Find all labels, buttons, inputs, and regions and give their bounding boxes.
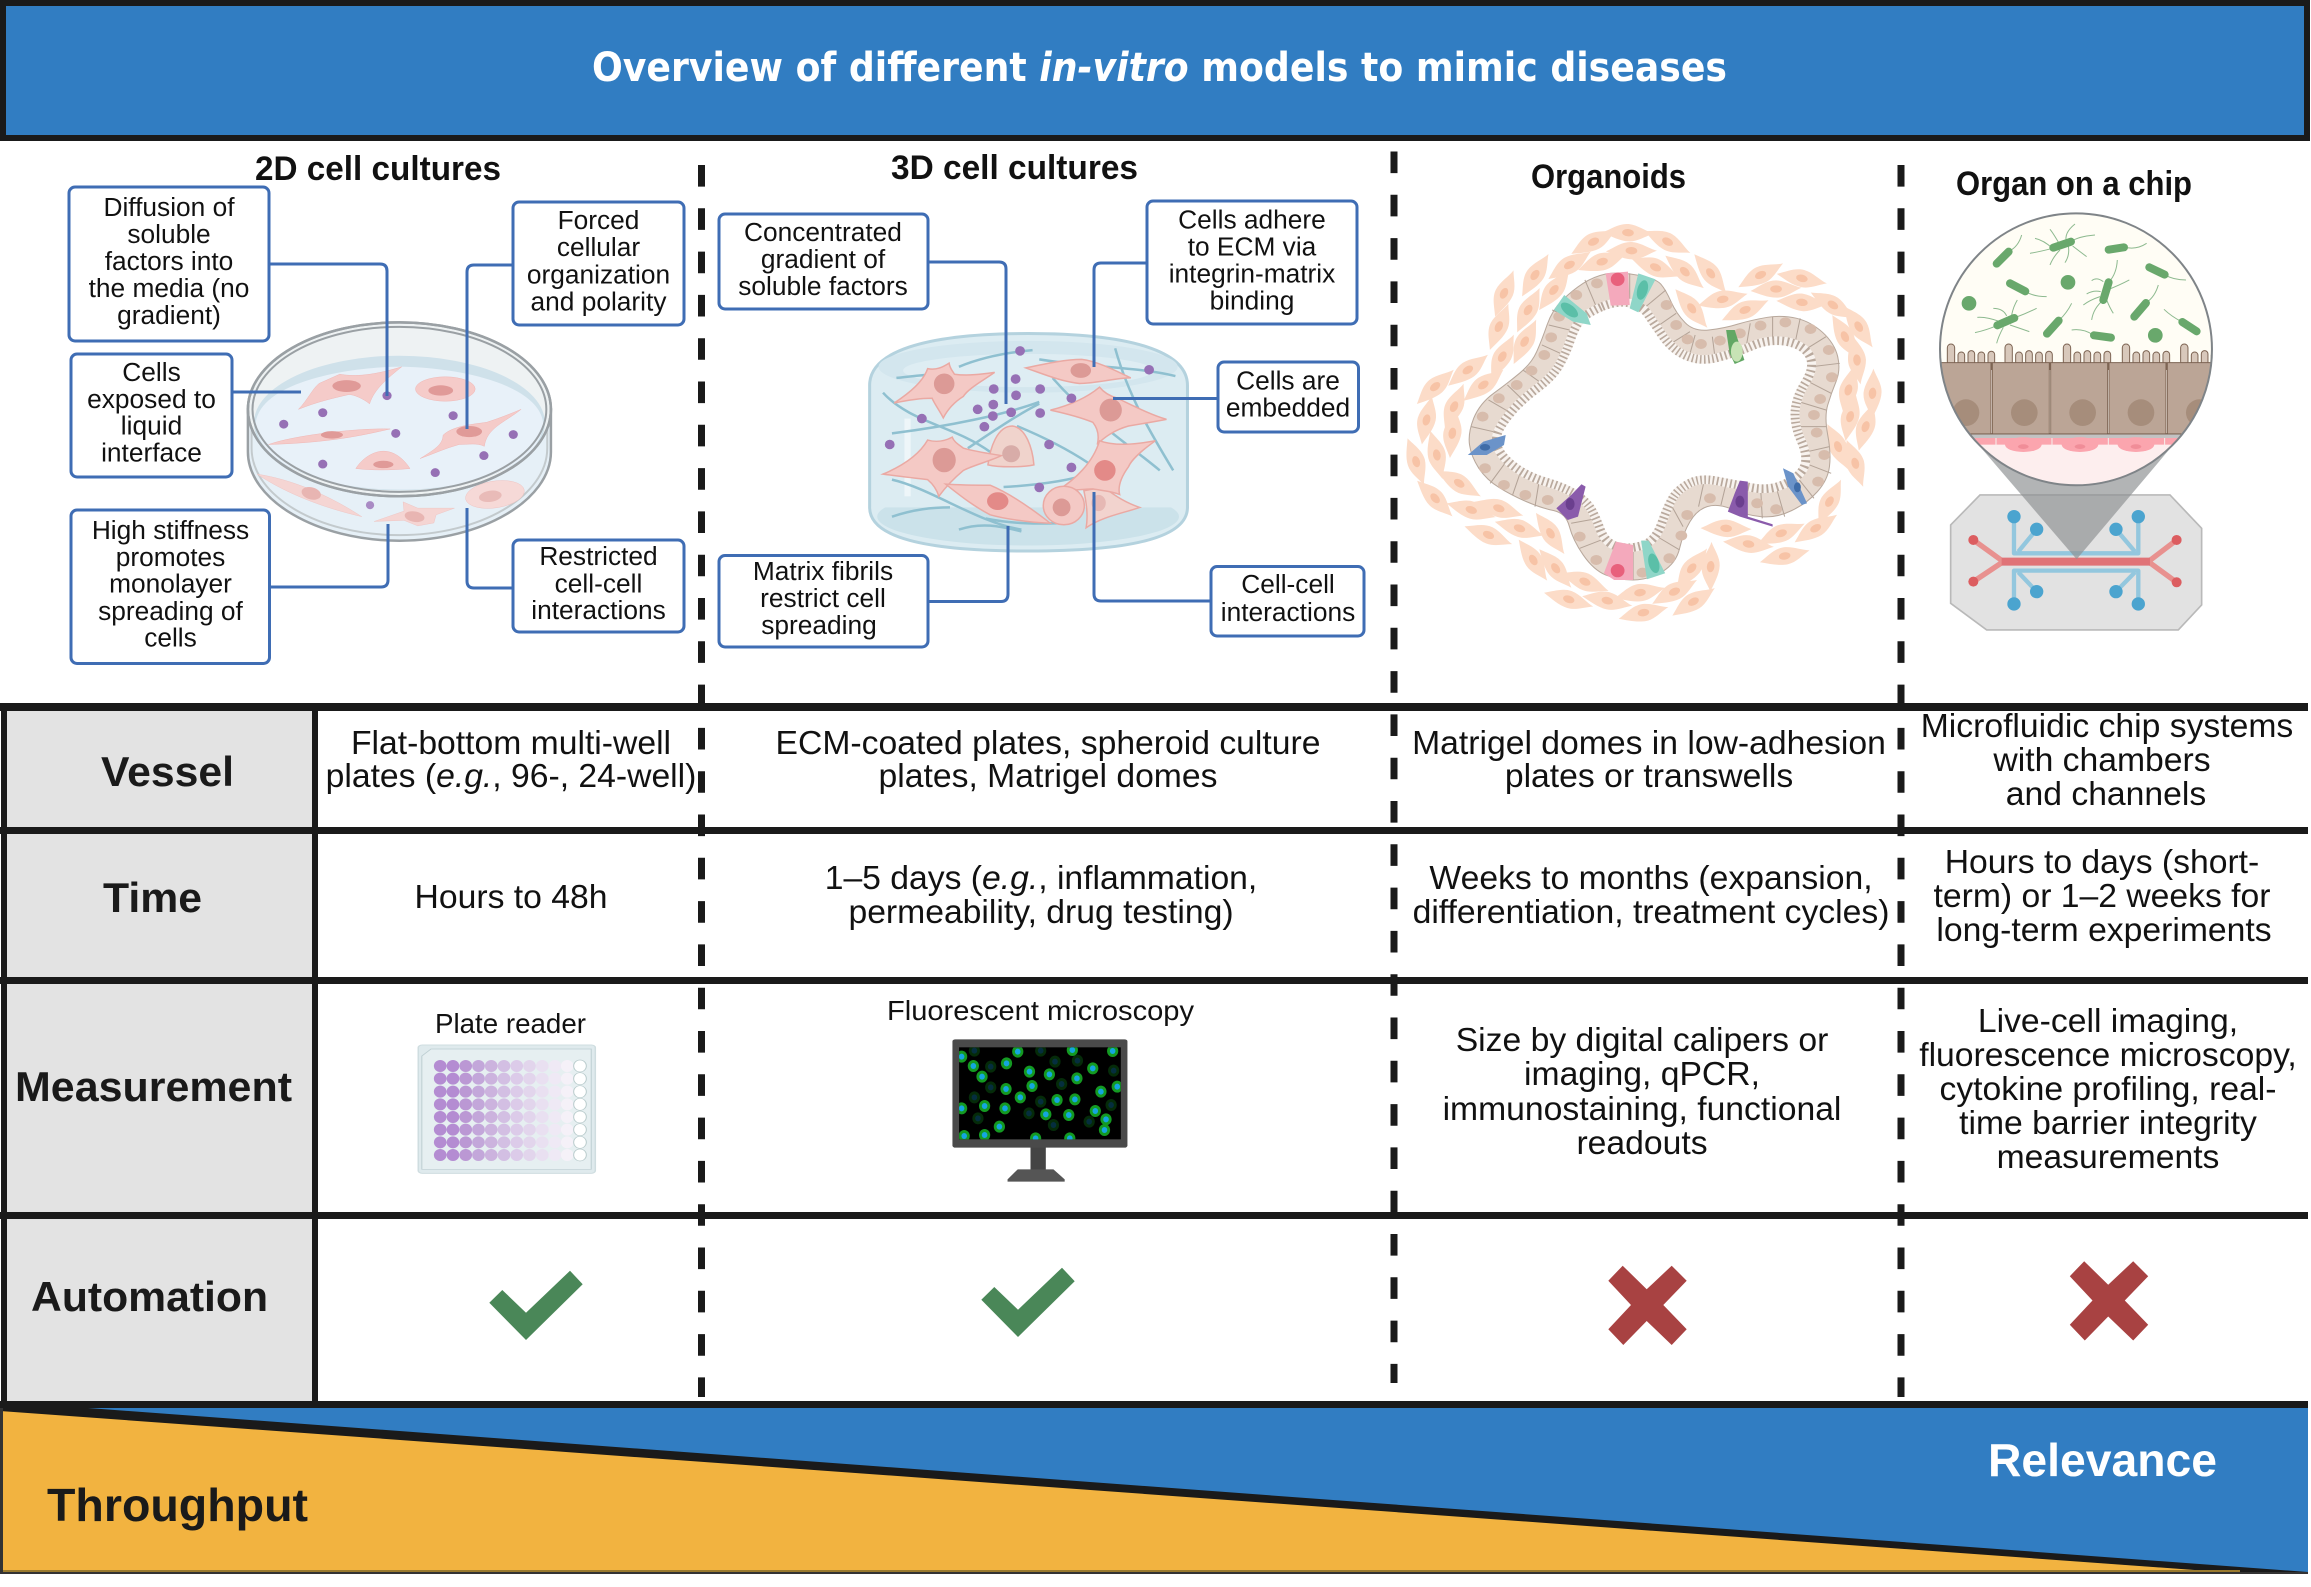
callout: concentrated gradient: [719, 214, 928, 309]
callout: high stiffness: [71, 510, 270, 664]
illustration: organ on a chip: [1939, 212, 2213, 631]
callout: high stiffness: promotes: [116, 542, 225, 572]
callout: high stiffness: cells: [144, 622, 197, 652]
text: measurement chip: [1919, 1002, 2297, 1176]
callout: concentrated gradient: Concentrated: [744, 217, 902, 247]
magnified tissue lens: [1939, 212, 2213, 486]
callout: matrix fibrils: [719, 556, 928, 647]
callout: diffusion: [69, 187, 269, 341]
callout: liquid interface: interface: [101, 438, 202, 468]
illustration: 3D hydrogel with embedded cells: [870, 334, 1187, 551]
table grid: [0, 703, 2308, 1409]
row label: Measurement: Measurement: [15, 1063, 292, 1110]
text: time chip: Hours to days (short-: [1945, 843, 2259, 881]
connector lines: [928, 262, 1218, 602]
callout: forced organization: organization: [527, 260, 670, 290]
callout: forced organization: and polarity: [531, 286, 667, 316]
measurement: plate reader: Plate reader: [435, 1008, 586, 1039]
title banner: [3, 3, 2307, 138]
chip: [1951, 495, 2202, 630]
text: vessel 3D: ECM-coated plates, spheroid culture: [776, 724, 1320, 762]
callout: forced organization: cellular: [557, 232, 640, 262]
bacteria: [1962, 224, 2197, 343]
text: vessel chip: with chambers: [1992, 741, 2211, 779]
text: time 3D: [825, 859, 1257, 931]
callout: ECM adhesion: binding: [1210, 286, 1294, 316]
callout: forced organization: [513, 202, 684, 325]
text: measurement chip: time barrier integrity: [1959, 1104, 2257, 1142]
text: measurement chip: cytokine profiling, real-: [1939, 1070, 2277, 1108]
icon: cross organoids: [1608, 1266, 1687, 1345]
text: vessel 2D: Flat-bottom multi-well: [351, 724, 671, 762]
panel: row header shading: [7, 710, 312, 1404]
text: time 3D: permeability, drug testing): [848, 893, 1234, 931]
label: Throughput: Throughput: [47, 1479, 308, 1531]
callout: embedded: embedded: [1226, 392, 1350, 422]
callout: liquid interface: exposed to: [87, 384, 216, 414]
text: time chip: long-term experiments: [1936, 911, 2272, 949]
text: time organoids: [1413, 859, 1889, 931]
callout: ECM adhesion: to ECM via: [1188, 232, 1317, 262]
callout: ECM adhesion: integrin-matrix: [1169, 258, 1335, 288]
callout: high stiffness: High stiffness: [92, 515, 249, 545]
text: measurement organoids: immunostaining, functional: [1443, 1090, 1841, 1128]
illustration: petri dish with 2D cells: [248, 322, 551, 541]
measurement: fluorescent microscopy: Fluorescent microscopy: [887, 995, 1194, 1026]
text: vessel 3D: [776, 724, 1320, 795]
text: measurement chip: fluorescence microscopy,: [1919, 1036, 2297, 1074]
dashed column separators: [702, 152, 1901, 1397]
icon: 96-well plate: [418, 1045, 595, 1173]
text: measurement chip: measurements: [1997, 1138, 2219, 1176]
text: time organoids: differentiation, treatment cycles): [1413, 893, 1889, 931]
text: vessel chip: Microfluidic chip systems: [1921, 707, 2293, 745]
measurement: fluorescent microscopy: [887, 995, 1194, 1182]
heading: Organ on a chip: Organ on a chip: [1956, 165, 2192, 203]
row label: Time: Time: [103, 874, 202, 921]
heading: Organoids: Organoids: [1531, 158, 1686, 196]
magnification cone: [1980, 447, 2172, 559]
callout: diffusion: Diffusion of: [103, 192, 235, 222]
text: measurement organoids: Size by digital calipers or: [1456, 1021, 1828, 1059]
callout: liquid interface: liquid: [121, 410, 182, 440]
text: time 3D: 1–5 days (e.g., inflammation,: [825, 859, 1257, 897]
callout: restricted interactions: cell-cell: [555, 568, 642, 598]
text: measurement organoids: imaging, qPCR,: [1524, 1055, 1760, 1093]
label: Relevance: Relevance: [1988, 1434, 2217, 1486]
gradient wedge: relevance versus throughput: [0, 1408, 2308, 1574]
row label: Automation: Automation: [31, 1273, 268, 1320]
callout: diffusion: soluble: [127, 219, 211, 249]
callout: high stiffness: monolayer: [109, 568, 232, 598]
callout: diffusion: factors into: [105, 246, 233, 276]
text: vessel 2D: [326, 724, 696, 795]
text: time 2D: Hours to 48h: [415, 878, 607, 916]
callout: diffusion: gradient): [117, 300, 221, 330]
icon: check 2D: [489, 1271, 583, 1340]
callout: diffusion: the media (no: [89, 273, 249, 303]
callout: restricted interactions: [513, 540, 684, 632]
callout: concentrated gradient: soluble factors: [738, 271, 908, 301]
callouts: 3D cell cultures: [719, 201, 1364, 647]
measurement: plate reader: [418, 1008, 595, 1173]
illustration: organoid: [1401, 222, 1884, 625]
callout: restricted interactions: interactions: [531, 595, 666, 625]
fibroblast layer: [1401, 222, 1884, 625]
title banner: Overview of different in-vitro models to mimic diseases: [592, 45, 1727, 91]
callout: embedded: [1218, 362, 1358, 432]
callout: cell-cell interactions: interactions: [1221, 597, 1355, 627]
text: measurement organoids: readouts: [1576, 1124, 1708, 1162]
text: vessel organoids: plates or transwells: [1505, 757, 1793, 795]
callout: liquid interface: Cells: [122, 357, 181, 387]
text: time organoids: Weeks to months (expansion,: [1429, 859, 1873, 897]
callout: matrix fibrils: Matrix fibrils: [753, 556, 893, 586]
text: measurement chip: Live-cell imaging,: [1978, 1002, 2238, 1040]
callout: matrix fibrils: restrict cell: [760, 583, 886, 613]
icon: monitor with cells: [952, 1039, 1127, 1182]
callout: high stiffness: spreading of: [98, 596, 244, 626]
text: measurement organoids: [1443, 1021, 1841, 1162]
heading: 2D cell cultures: 2D cell cultures: [255, 150, 501, 188]
connector lines: [232, 264, 513, 588]
icon: check 3D: [981, 1268, 1075, 1337]
text: vessel chip: [1921, 707, 2293, 813]
epithelium ring: [1469, 273, 1840, 580]
text: time chip: [1934, 843, 2272, 949]
callout: ECM adhesion: [1147, 201, 1357, 324]
text: vessel organoids: Matrigel domes in low-adhesion: [1412, 724, 1886, 762]
callouts: 2D cell cultures: [69, 187, 684, 664]
heading: 3D cell cultures: 3D cell cultures: [891, 149, 1138, 187]
text: vessel organoids: [1412, 724, 1886, 795]
specialised epithelial cells: [1468, 272, 1807, 580]
text: time chip: term) or 1–2 weeks for: [1934, 877, 2270, 915]
callout: matrix fibrils: spreading: [761, 610, 877, 640]
text: vessel chip: and channels: [2006, 775, 2206, 813]
callout: ECM adhesion: Cells adhere: [1178, 204, 1326, 234]
callout: embedded: Cells are: [1236, 366, 1340, 396]
text: vessel 2D: plates (e.g., 96-, 24-well): [326, 757, 696, 795]
text: vessel 3D: plates, Matrigel domes: [879, 757, 1217, 795]
callout: restricted interactions: Restricted: [539, 541, 658, 571]
callout: concentrated gradient: gradient of: [761, 244, 886, 274]
callout: forced organization: Forced: [558, 205, 639, 235]
icon: cross chip: [2070, 1261, 2148, 1340]
row label: Vessel: Vessel: [101, 748, 234, 795]
callout: cell-cell interactions: Cell-cell: [1241, 569, 1335, 599]
callout: cell-cell interactions: [1211, 566, 1364, 636]
callout: liquid interface: [71, 354, 232, 477]
